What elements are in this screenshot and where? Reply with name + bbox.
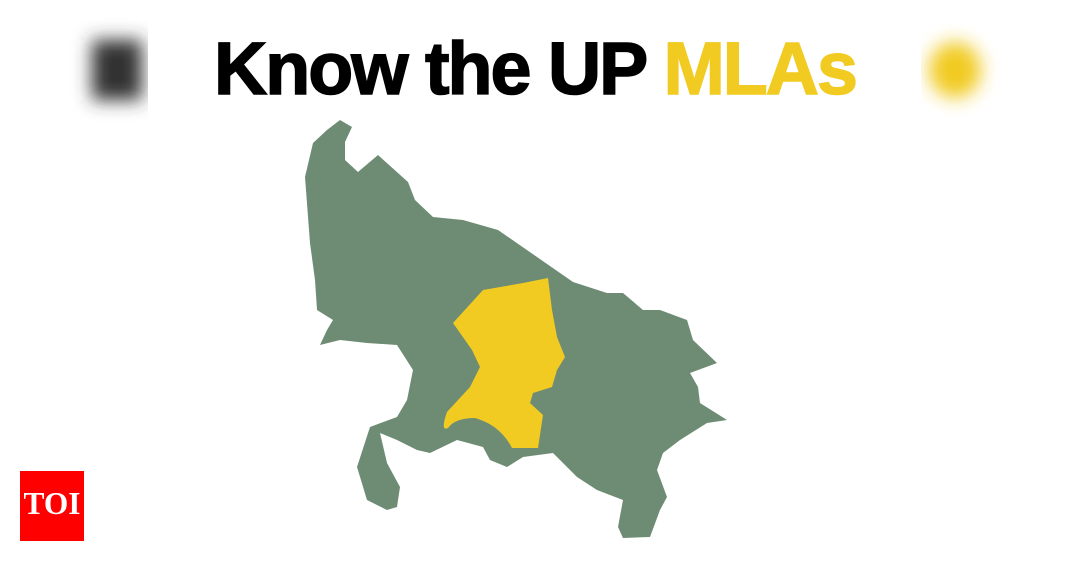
- title: Know the UP MLAs: [214, 27, 856, 110]
- logo: TOI: TOI: [24, 485, 80, 521]
- blurred background edge: left: [92, 40, 142, 100]
- map: Uttar Pradesh: [305, 120, 727, 538]
- logo: TOI: [20, 471, 84, 541]
- highlighted region: [444, 278, 565, 448]
- blurred background edge: right: [929, 42, 981, 98]
